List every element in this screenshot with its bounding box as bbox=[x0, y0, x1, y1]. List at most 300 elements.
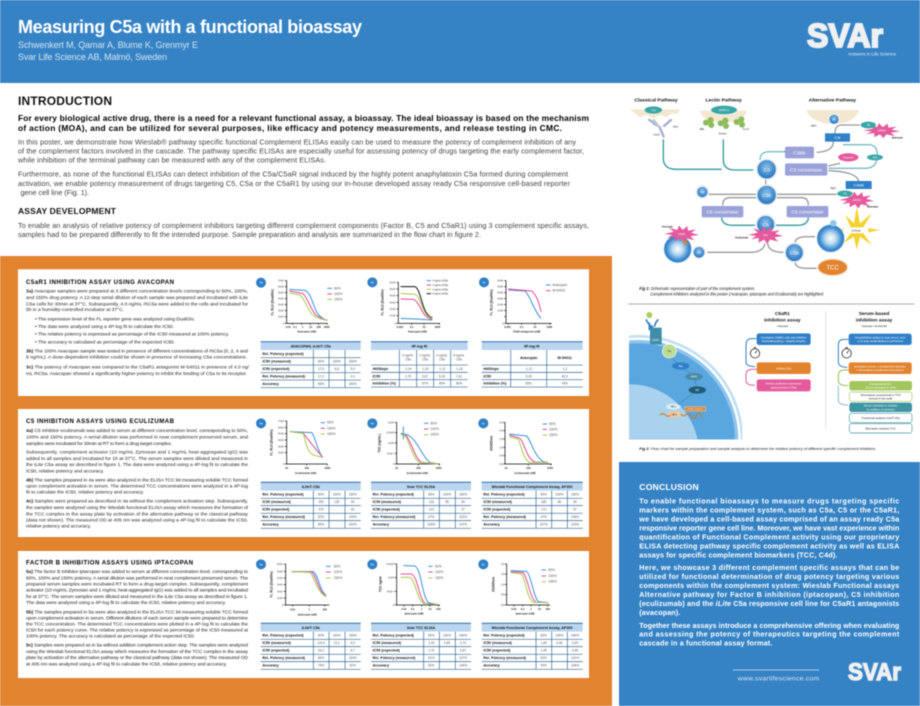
table 5c: IC50 (measured) bbox=[483, 641, 513, 645]
table 3a: 8,8 bbox=[335, 367, 339, 371]
table 3b: 3,67 bbox=[422, 374, 428, 378]
table 5c: 1,84 bbox=[541, 641, 547, 645]
description: samples were incubated for 30min at RT to form a drug-target complex. bbox=[26, 441, 172, 447]
chart 4c: 2.5 bbox=[499, 422, 503, 424]
table 4b: Rel. Potency (measured) bbox=[373, 515, 416, 519]
chart 3b bbox=[367, 277, 449, 334]
chart 5a: 100% bbox=[334, 570, 342, 574]
chart 4a: FL RLU (DualGlo) bbox=[269, 429, 273, 455]
chart 3b: 6×10⁵ bbox=[390, 280, 396, 284]
chart 4b: 100 bbox=[416, 466, 421, 470]
table 5a: 100% bbox=[333, 634, 341, 638]
flow boxes: serum-based: Drug/inhibitor added to neat serum, and bbox=[855, 335, 905, 339]
chart 4a: 100% bbox=[327, 426, 336, 430]
C5 convertase boxes bbox=[702, 206, 828, 217]
column heading: C5aR1: • Avacopan bbox=[777, 325, 789, 328]
logo: SVAR footer: SVAr bbox=[848, 659, 901, 686]
table 3a: 50% bbox=[318, 360, 324, 364]
table 3b: 4 ng/mL bbox=[436, 354, 448, 358]
table 5c: 141% bbox=[571, 656, 579, 660]
chart 3b: Avacopan (nM) bbox=[408, 330, 427, 334]
chart 4a: 7×10⁵ bbox=[278, 419, 284, 423]
pathway titles: Alternative Pathway bbox=[809, 98, 856, 104]
column heading: serum-based: Serum-based bbox=[859, 311, 889, 317]
description: C5a cells for 30min at 37°C. Subsequently, 4.0 ng/mL rhC5a were added to the cells and incubated for bbox=[26, 301, 248, 307]
description: for at 37°C. The serum samples were diluted and measured in the iLite C5a assay as described in figure 1. bbox=[26, 594, 248, 600]
flow boxes: serum-based: Serum activated in wells bbox=[865, 386, 896, 390]
chart 5a: 2×10⁴ bbox=[277, 589, 283, 593]
table 5c: 99% bbox=[541, 664, 547, 668]
chart 5b: 1 bbox=[421, 607, 423, 611]
intro paragraph 1: while inhibition of the terminal pathway can be measured with any of the complement ELISAs. bbox=[17, 156, 326, 165]
description bbox=[26, 428, 249, 530]
table 4a: Accuracy bbox=[262, 523, 280, 527]
description: the samples were analyzed using the Wieslab functional ELISA assay which measures the formation of bbox=[26, 505, 249, 511]
membranes bbox=[630, 109, 859, 124]
table 4a: Rel. Potency (expected) bbox=[262, 493, 304, 497]
chart 4b bbox=[367, 418, 442, 475]
description: relative potency and accuracy. bbox=[26, 524, 91, 530]
table 5a: 66% bbox=[318, 656, 324, 660]
pathway titles bbox=[634, 98, 856, 104]
table 3a: 100% bbox=[349, 382, 357, 386]
C5 convertase boxes: C5 convertase bbox=[791, 209, 824, 215]
card: factor B inhibition assays bbox=[18, 551, 589, 678]
table 5c: 106% bbox=[571, 664, 579, 668]
chart 3c: 1×10⁵ bbox=[497, 309, 504, 313]
table 4b: 147% bbox=[459, 523, 467, 527]
conclusion paragraph 3: Together these assays introduce a comprehensive offering when evaluating bbox=[639, 621, 899, 630]
chart 4a: 1000 bbox=[324, 466, 331, 470]
table 4c: IC50 (expected) bbox=[483, 508, 511, 512]
classical pathway complex: C1rs2 bbox=[654, 134, 660, 137]
table 3b: -1,04 bbox=[404, 367, 412, 371]
classical pathway complex bbox=[645, 106, 679, 137]
chart 5a: 50% bbox=[334, 564, 340, 568]
chart 5b: 1.5×10⁰ bbox=[386, 563, 394, 566]
chart 5c: 2.0 bbox=[501, 564, 505, 566]
chart 4c: 1.5 bbox=[499, 439, 503, 441]
chart 4c: 0.5 bbox=[499, 456, 503, 458]
table 3a: Rel. Potency (expected) bbox=[262, 352, 304, 356]
chart 5a: 3×10⁴ bbox=[277, 583, 283, 587]
flow boxes: serum-based bbox=[849, 334, 912, 433]
card: C5aR1 inhibition assay bbox=[18, 269, 589, 396]
table 4a: 90 bbox=[351, 508, 355, 512]
table 5b: 0,85 bbox=[444, 641, 450, 645]
chart 3a: 6×10⁵ bbox=[278, 285, 284, 289]
table 4c: Rel. Potency (expected) bbox=[483, 493, 525, 497]
chart 3a: 3a bbox=[259, 281, 263, 285]
chart 3a: Avacopan (nM) bbox=[297, 330, 316, 334]
chart 5a: 100 bbox=[322, 607, 327, 611]
table 5b: 82% bbox=[428, 664, 435, 668]
table 4c: 146% bbox=[571, 515, 579, 519]
chart 5b: 100% bbox=[435, 570, 444, 574]
description: IC50, relative potency and accuracy. bbox=[26, 468, 104, 474]
chart 5b: 5b bbox=[371, 562, 374, 566]
table 4b: 37 bbox=[461, 508, 465, 512]
classical pathway complex: Ca2+ bbox=[673, 126, 679, 128]
table 3a: IC50 (measured) bbox=[262, 360, 292, 364]
chart 5a: 4×10⁴ bbox=[277, 576, 283, 580]
regulators bbox=[838, 153, 883, 162]
table 5c: 53% bbox=[541, 656, 547, 660]
receptor bbox=[646, 319, 658, 330]
table 4c: Rel. Potency (measured) bbox=[483, 515, 527, 519]
table 3a: IC50 (expected) bbox=[262, 367, 290, 371]
table 4c bbox=[482, 482, 583, 528]
table 3b: C5a bbox=[422, 358, 428, 362]
table 3a: Accuracy bbox=[262, 382, 280, 386]
description bbox=[26, 569, 249, 667]
table 3c bbox=[482, 342, 583, 387]
chart 5a bbox=[256, 559, 342, 616]
intro paragraph 1: of the complement factors involved in the cascade. The pathway specific ELISAs are especially useful for assessing potency of drugs targeting the early complement factor, bbox=[18, 147, 584, 156]
table 5a: 163% bbox=[349, 656, 357, 660]
pathway titles: Classical Pathway bbox=[634, 98, 678, 104]
heading: assay development: ASSAY DEVELOPMENT bbox=[18, 206, 117, 216]
iptacopan inhibitor: Mg2+ bbox=[830, 188, 837, 190]
table 3c: IC50 bbox=[483, 374, 491, 378]
table 3c: 40,3 bbox=[562, 374, 568, 378]
cell lysis: Cell lysis bbox=[851, 231, 861, 233]
avacopan and C5aR1 cell: Avacopan bbox=[662, 226, 673, 229]
chart 5a: 150% bbox=[334, 576, 342, 580]
description: • The expression level of the FL reporter gene was analyzed using DualGlo. bbox=[35, 317, 195, 323]
eculizumab inhibitor: Eculizumab bbox=[735, 237, 749, 239]
table 3b: 0 ng/mL bbox=[402, 354, 414, 358]
iptacopan inhibitor: FB bbox=[844, 194, 847, 196]
table 4c: 47% bbox=[541, 515, 547, 519]
column heading: C5aR1: inhibition assay bbox=[764, 318, 801, 324]
description: IC50 for each potency curve. The relative potency is expressed as percentage of the IC50 measured at bbox=[26, 628, 249, 634]
intro paragraph 2: Furthermore, as none of the functional ELISAs can detect inhibition of the C5a/C5aR signal induced by the highly potent anaphylatoxin C5a formed during complement bbox=[18, 170, 568, 179]
figure 1 caption bbox=[639, 286, 824, 296]
table 4b: IC50 (measured) bbox=[373, 500, 402, 504]
flow boxes: serum-based: Serum activated in solution bbox=[864, 404, 898, 408]
chart 3c: 0.1 bbox=[520, 325, 524, 329]
introduction section bbox=[17, 94, 589, 239]
table 5b: 107% bbox=[459, 656, 467, 660]
chart 3a: 1 bbox=[302, 325, 304, 329]
lead statement: of action (MOA), and can be utilized for several purposes, like efficacy and potency measurements, and release testing in CMC. bbox=[18, 123, 562, 133]
description: mL rhC5a. Avacopan showed a significantly higher potency to inhibit the binding of C5a to its receptor. bbox=[26, 371, 247, 377]
circle labels: C3b bbox=[762, 193, 771, 199]
chart 5b: 0.01 bbox=[401, 607, 407, 611]
description: 100% and 150% potency. A serial dilution was performed in neat complement preserved serum, and bbox=[26, 435, 248, 441]
figure 2 caption: Fig 2: Flow chart for sample preparation and sample analysis to determine the relative potency of different specific complement inhibitors. bbox=[639, 446, 876, 451]
chart 4c: 4c bbox=[482, 421, 485, 425]
flow boxes: C5aR1: Adding C5a bbox=[776, 366, 791, 370]
avacopan and C5aR1 cell: C5aR1 bbox=[678, 234, 686, 236]
table 4c: 107% bbox=[540, 523, 548, 527]
alternative pathway complex: C3 bbox=[833, 119, 836, 121]
description: 5b) The samples prepared in 5a were also analyzed in the ELISA TCC kit measuring soluble TCC formed bbox=[26, 610, 248, 616]
table 5a: 8,0 bbox=[351, 641, 355, 645]
table 3b: Inhibition (%) bbox=[373, 382, 397, 386]
table 4a: 52% bbox=[318, 515, 324, 519]
chart 3a: 0 bbox=[283, 323, 285, 325]
chart 5c: Iptacopan (uM) bbox=[516, 612, 535, 616]
description bbox=[26, 289, 250, 377]
table 3c: 78% bbox=[562, 382, 568, 386]
chart 5b: 50% bbox=[435, 564, 442, 568]
chart 3a: 2×10⁵ bbox=[278, 309, 284, 313]
chart 4a: 100 bbox=[304, 466, 309, 470]
stopwatches bbox=[750, 348, 851, 358]
cell illustration: Ras bbox=[679, 366, 684, 368]
chart 5b: 100 bbox=[436, 607, 441, 611]
table 4b: 55 bbox=[445, 500, 449, 504]
chart 4c: 10 bbox=[505, 466, 508, 470]
table 4b: Accuracy bbox=[373, 523, 390, 527]
chart 4b: 4b bbox=[371, 421, 374, 425]
conclusion paragraph 2: components within the complement system: Wieslab Functional assays bbox=[639, 581, 899, 590]
chart 4a: 2×10⁵ bbox=[278, 451, 284, 455]
description: 3c) The potency of Avacopan was compared to the C5aR1 antagonist W-54011 in presence of 4.0 ng/ bbox=[26, 364, 250, 370]
chart 5a: 0.01 bbox=[290, 607, 296, 611]
figure 2: assay flow chart bbox=[628, 311, 914, 440]
table 4a: IC50 (expected) bbox=[262, 508, 290, 512]
eculizumab inhibitor bbox=[735, 226, 783, 244]
table 4c: 57 bbox=[573, 508, 577, 512]
chart 5a: 6×10⁴ bbox=[277, 562, 283, 566]
conclusion paragraph 1: responsive reporter gene cell line. Moreover, we have vast experience within bbox=[639, 523, 899, 532]
table 4b: 102% bbox=[459, 515, 467, 519]
table 3a: AVACOPAN, iLite® C5a bbox=[290, 344, 331, 348]
description: 4a) C5 inhibitor eculizumab was added to serum at different concentration level, corresponding to 50%, bbox=[26, 428, 248, 434]
table 4b: IC50 (expected) bbox=[373, 508, 400, 512]
cell illustration: MAPK bbox=[691, 376, 698, 379]
description: 5c) Samples were prepared as in 5a without addition complement action step. The samples were analyzed bbox=[26, 643, 248, 649]
website: www.svarlifescience.com bbox=[737, 675, 820, 682]
regulators: Properdin bbox=[843, 156, 854, 159]
description: Subsequently, complement activator (10 mg/mL Zymosan and 1 mg/mL heat-aggregated IgG) was bbox=[26, 450, 249, 456]
chart 3b: 1000 bbox=[434, 325, 441, 329]
chart 5c bbox=[478, 559, 557, 616]
table 5c: IC50 (expected) bbox=[483, 649, 511, 653]
table 3b: -1,12 bbox=[438, 367, 446, 371]
flow boxes: C5aR1: Incubation C5aR1 cells and inhibitor bbox=[761, 335, 806, 339]
conclusion paragraph 1: ELISA detecting pathway specific complement activity as well as ELISA bbox=[639, 541, 899, 550]
authors: Schwenkert M, Qamar A, Blume K, Grenmyr E bbox=[18, 40, 198, 50]
alternative pathway complex: LNP023 bbox=[877, 131, 887, 133]
table 3b: 90% bbox=[456, 382, 462, 386]
chart 4a: 3×10⁵ bbox=[278, 444, 284, 448]
table 4c: IC50 (measured) bbox=[483, 500, 513, 504]
description: 3b) The 100% Avacopan sample was tested in presence of different concentrations of rhC5a (0, 2, 4 and bbox=[26, 348, 248, 354]
conclusion paragraph 2 bbox=[639, 563, 899, 617]
logo: SVAR: SVAr bbox=[807, 17, 883, 54]
table 3c: W-54011 bbox=[557, 356, 572, 360]
lectin pathway complex: MASP1-3 bbox=[719, 109, 730, 112]
table 5a: 50% bbox=[318, 634, 324, 638]
chart 5c: 150% bbox=[548, 580, 557, 584]
table 5c: 1,95 bbox=[541, 649, 547, 653]
chart 4c: 100% bbox=[549, 427, 558, 431]
conclusion paragraph 3: and assessing the potency of therapeutics targeting the complement bbox=[639, 630, 900, 639]
lead statement: For every biological active drug, there is a need for a relevant functional assay, a bioassay. The ideal bioassay is based on the mechanism bbox=[18, 113, 589, 123]
cell illustration: Gα bbox=[668, 351, 672, 353]
table 4c: 185 bbox=[541, 500, 547, 504]
C3b box bbox=[785, 147, 814, 158]
table 3b: C5a bbox=[439, 358, 445, 362]
description: plate by activation of the alternative pathway or the classical pathway (data not shown). The measured OD bbox=[26, 655, 248, 661]
description: prepared serum samples were incubated RT to form a drug-target complex. Subsequently, complement bbox=[26, 582, 249, 588]
table 3a: 150% bbox=[349, 360, 357, 364]
table 3a bbox=[261, 342, 361, 388]
description: 8 ng/mL). A dose-dependent inhibition could be shown in presence of increasing C5a concentrations. bbox=[26, 355, 247, 361]
table 5c: 0,69 bbox=[572, 641, 578, 645]
table 5a: Rel. Potency (expected) bbox=[262, 634, 304, 638]
table 5c: 0,96 bbox=[556, 641, 563, 645]
chart 3c: 4×10⁵ bbox=[497, 291, 504, 295]
blue C3 labels: C3bB bbox=[854, 183, 864, 188]
intro paragraph 2: gene cell line (Fig. 1). bbox=[20, 188, 89, 197]
table 5c: 100% bbox=[555, 634, 564, 638]
chart 4a: 5×10⁵ bbox=[278, 432, 284, 436]
intro paragraph 2: activation, we enable potency measurement of drugs targeting C5, C5a or the C5aR1 by using our in-house developed assay ready C5a responsive cell-based reporter bbox=[18, 179, 571, 188]
table 4a: 50% bbox=[318, 493, 324, 497]
description: • The relative potency is expressed as percentage of the IC50 measured at 100% potency. bbox=[35, 332, 229, 338]
column heading: serum-based: inhibition assay bbox=[856, 318, 893, 324]
description: using the Wieslab functional ELISA assay which measures the formation of the TCC complex in the assay bbox=[26, 649, 249, 655]
chart 4c: 1000 bbox=[547, 466, 553, 470]
chart 3a: FL RLU (DualGlo) bbox=[270, 289, 274, 315]
lectin pathway complex: Ficolins bbox=[719, 133, 727, 135]
iptacopan inhibitor: LNP023 bbox=[852, 200, 862, 202]
chart 3b: 5×10⁵ bbox=[390, 287, 396, 291]
table 5b: Rel. Potency (measured) bbox=[373, 656, 416, 660]
table 5c: Accuracy bbox=[483, 664, 501, 668]
chart 5b: 0 bbox=[393, 605, 395, 607]
alternative pathway complex: Mg2+ bbox=[811, 126, 818, 128]
chart 4a: 150% bbox=[327, 432, 336, 436]
chart 4b: 1×10⁰ bbox=[388, 442, 394, 445]
table 3b: 1,70 bbox=[405, 374, 411, 378]
chart 5c: 1.0 bbox=[501, 584, 505, 586]
chart 5c: 100 bbox=[545, 607, 550, 611]
conclusion paragraph 1: quantification of Functional Complement activity using our proprietary bbox=[639, 532, 899, 541]
table 5b: IC50 (measured) bbox=[373, 641, 402, 645]
table 5b: Svar TCC ELISA bbox=[407, 626, 435, 630]
table 4c: 150% bbox=[571, 493, 579, 497]
TCC: TCC bbox=[827, 265, 839, 271]
chart 3c: 0.001 bbox=[504, 325, 512, 329]
conclusion paragraph 1 bbox=[638, 497, 900, 559]
intro paragraph 1: In this poster, we demonstrate how Wieslab® pathway specific functional Complement ELISAs easily can be used to measure the potency of complement inhibition of any bbox=[18, 138, 576, 147]
description: 5a) The factor B inhibitor iptacopan was added to serum at different concentration level, corresponding to bbox=[26, 569, 248, 575]
chart 3c: 3c bbox=[482, 280, 486, 284]
table 5a: 92% bbox=[350, 664, 356, 668]
table 3b: HillSlope bbox=[373, 367, 388, 371]
table 3a: 17,2 bbox=[318, 375, 324, 379]
column heading: C5aR1 bbox=[764, 311, 801, 328]
cell illustration bbox=[628, 311, 743, 440]
assay development text: samples had to be prepared differently to fit the intended purpose. Sample preparation and analysis are summarized in the flow chart in figure 2. bbox=[18, 230, 481, 239]
flow boxes: serum-based: by addition of activator bbox=[867, 407, 895, 411]
flow boxes: C5aR1: Firefly Luciferase expression bbox=[766, 382, 802, 386]
chart 4b: 1000 bbox=[436, 466, 442, 470]
chart 5c: 0.0 bbox=[501, 605, 505, 607]
table 5a: iLite® C5a bbox=[302, 626, 320, 630]
table 4a: 100% bbox=[333, 493, 341, 497]
conclusion paragraph 2: Alternative pathway for Factor B inhibition (iptacopan), C5 inhibition bbox=[639, 590, 899, 599]
eculizumab inhibitor: Ecu bbox=[764, 235, 768, 237]
chart 3a: 3×10⁵ bbox=[278, 303, 284, 307]
flow boxes: serum-based: Biomarker analysis TCC bbox=[865, 426, 896, 430]
chart 5b: TCC ng/ml bbox=[379, 576, 383, 592]
C3 C3b C5 C5b circles bbox=[696, 159, 804, 262]
chart 3a: 1×10⁵ bbox=[278, 315, 284, 319]
table 3b: C5a bbox=[456, 358, 462, 362]
table 5a: 13,1 bbox=[334, 641, 340, 645]
chart 3b: 0.1 bbox=[410, 325, 414, 329]
flow boxes: serum-based: = Generating complement biomarkers bbox=[856, 368, 904, 372]
figure 1 caption: Fig 1: Schematic representation of part of the complement system. bbox=[639, 286, 755, 291]
header band bbox=[0, 0, 920, 83]
table 4b bbox=[371, 482, 471, 528]
chart 5b: 1×10⁰ bbox=[388, 577, 394, 580]
blue C3 labels: C3i bbox=[834, 135, 840, 140]
chart 3a: 100% bbox=[334, 292, 343, 296]
chart 3b: 8 ng/mL rhC5a bbox=[433, 293, 449, 296]
chart 4b: 100% bbox=[430, 427, 439, 431]
table 3c: HillSlope bbox=[483, 367, 499, 371]
assay development text bbox=[18, 221, 589, 239]
table 3c: 95% bbox=[526, 382, 532, 386]
table 4b: 110 bbox=[429, 508, 434, 512]
C5 convertase boxes: C5 convertase bbox=[706, 209, 739, 215]
table 5a bbox=[261, 623, 361, 669]
table 4a bbox=[261, 482, 361, 528]
chart 4c bbox=[478, 418, 558, 475]
table 3c: -1,12 bbox=[525, 367, 533, 371]
table 5c: Rel. Potency (measured) bbox=[483, 656, 527, 660]
table 3b: -1,28 bbox=[455, 367, 463, 371]
title: Measuring C5a with a functional bioassay bbox=[18, 17, 362, 37]
description: • The data were analyzed using a 4P-log fit to calculate the IC50. bbox=[35, 324, 174, 330]
table 5c bbox=[482, 623, 583, 669]
circle labels bbox=[700, 167, 799, 257]
chart 3c: 10 bbox=[534, 325, 537, 329]
table 4a: IC50 (measured) bbox=[262, 500, 292, 504]
chart 5a: 5×10⁴ bbox=[277, 569, 283, 573]
table 3a: 100% bbox=[333, 360, 341, 364]
chart 3a: 5×10⁵ bbox=[278, 291, 284, 295]
figure 1 caption: Complement inhibitors analyzed in this poster (Avacopan, Iptacopan and Eculizumab) are highlighted. bbox=[650, 291, 824, 296]
description: the TCC complex in the assay plate by activation of the alternative pathway or the classical pathway bbox=[26, 511, 249, 517]
chart 4b: 1.5×10⁰ bbox=[386, 432, 394, 435]
table 4a: iLite® C5a bbox=[302, 485, 320, 489]
chart 3c: FL RLU (DualGlo) bbox=[490, 289, 494, 315]
iptacopan inhibitor bbox=[830, 188, 879, 209]
table 4c: 59 bbox=[573, 500, 577, 504]
cell lysis bbox=[817, 207, 880, 252]
chart 3a: 0.1 bbox=[293, 325, 297, 329]
table 3b: -1,20 bbox=[421, 367, 429, 371]
chart 3c: C5aR antagonist (nM) bbox=[513, 330, 540, 334]
chart 4b: 50% bbox=[430, 421, 437, 425]
circle labels: C5b bbox=[790, 251, 799, 257]
chart 3c bbox=[479, 277, 567, 334]
intro paragraph 2 bbox=[18, 170, 571, 197]
description: the TCC concentration. The determined TCC concentrations were plotted in a 4P-log fit to calculate the bbox=[26, 622, 248, 628]
cell illustration: Firefly Luciferase bbox=[688, 408, 704, 411]
alternative pathway complex bbox=[811, 114, 903, 139]
chart 4c: 1.0 bbox=[499, 447, 503, 449]
